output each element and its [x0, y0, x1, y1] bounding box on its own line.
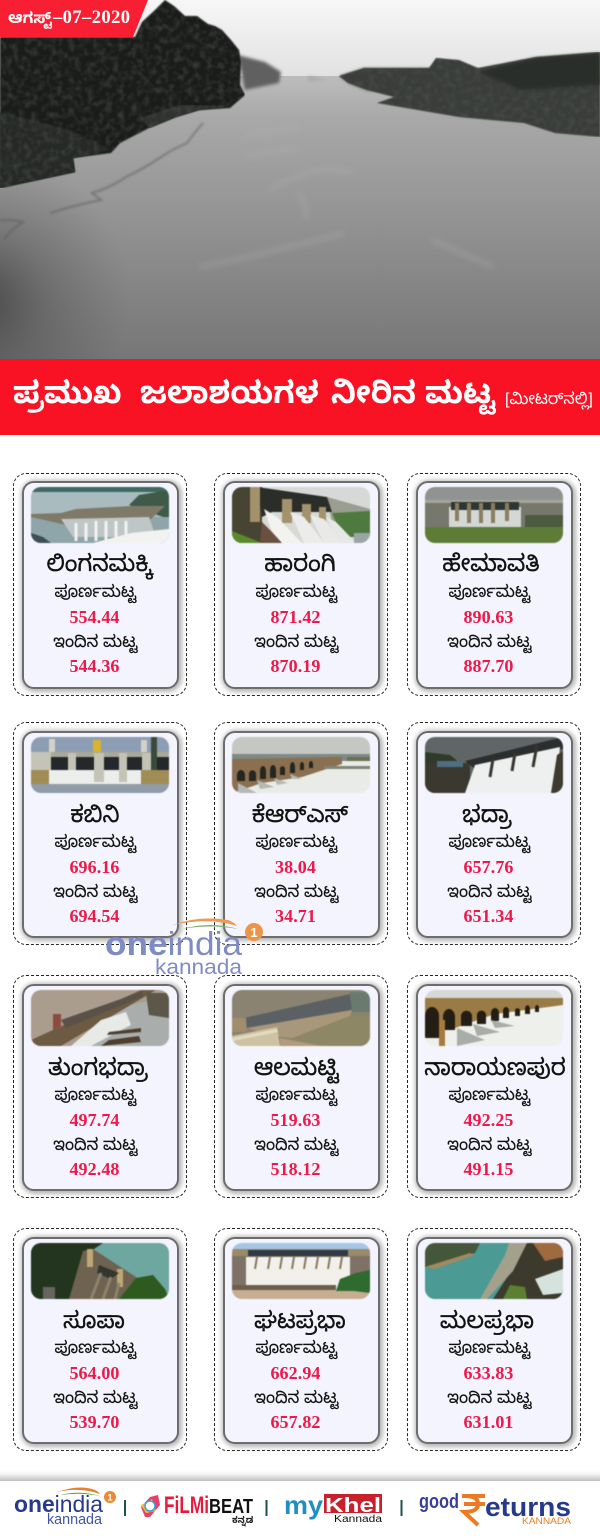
logo: goodreturns kannada: eturns [485, 1492, 571, 1522]
card: Kabini [13, 722, 187, 945]
hero photo: river in the rain [0, 0, 600, 359]
card: Tungabhadra [13, 975, 187, 1198]
logo: goodreturns kannada: KANNADA [522, 1516, 572, 1527]
card: Hemavathi [407, 473, 581, 696]
date flag: –07–2020 [52, 8, 130, 28]
photo: Bhadra dam [424, 736, 564, 794]
today level label: ಇಂದಿನ ಮಟ್ಟ [254, 1136, 339, 1154]
name: ಕಬಿನಿ [70, 801, 120, 827]
photo: Narayanapura dam [424, 990, 564, 1047]
watermark: oneindia kannada [105, 918, 263, 977]
logo: mykhel kannada: Khel [325, 1495, 381, 1517]
full level label: ಪೂರ್ಣಮಟ್ಟ [54, 1339, 137, 1357]
photo: Supa dam [30, 1242, 170, 1300]
photo: Malaprabha dam [424, 1242, 564, 1300]
card: Supa [13, 1228, 187, 1451]
footer logos [14, 1488, 572, 1528]
title heading: ನೀರಿನ [331, 375, 416, 410]
today level value: 631.01 [463, 1412, 514, 1432]
name: ಭದ್ರಾ [462, 801, 512, 827]
left bank and palms [0, 0, 245, 188]
separator [400, 1500, 402, 1516]
today level label: ಇಂದಿನ ಮಟ್ಟ [447, 883, 532, 901]
unit note: [ಮೀಟರ್‌ನಲ್ಲಿ] [505, 391, 593, 408]
card: Ghataprabha [214, 1228, 388, 1451]
today level value: 657.82 [270, 1412, 321, 1432]
separator [124, 1500, 126, 1516]
full level value: 696.16 [69, 857, 120, 877]
logo: mykhel kannada: my [284, 1490, 324, 1520]
logo: oneindia kannada: oneindia [14, 1491, 103, 1517]
full level value: 633.83 [463, 1363, 514, 1383]
title heading: ಪ್ರಮುಖ [13, 375, 122, 410]
today level label: ಇಂದಿನ ಮಟ್ಟ [254, 1389, 339, 1407]
logo: mykhel kannada: Kannada [334, 1514, 383, 1525]
name: ನಾರಾಯಣಪುರ [424, 1054, 566, 1080]
logo: oneindia kannada: kannada [47, 1511, 103, 1528]
photo: Almatti dam [231, 989, 371, 1047]
name: ಘಟಪ್ರಭಾ [254, 1307, 346, 1333]
today level value: 651.34 [463, 906, 514, 926]
name: ಮಲಪ್ರಭಾ [440, 1307, 534, 1333]
full level label: ಪೂರ್ಣಮಟ್ಟ [255, 833, 338, 851]
today level label: ಇಂದಿನ ಮಟ್ಟ [254, 633, 339, 651]
card: Narayanapura [407, 975, 581, 1198]
logo: filmibeat: ಕನ್ನಡ [232, 1515, 254, 1528]
card: Bhadra [407, 722, 581, 945]
full level value: 890.63 [463, 607, 514, 627]
separator [266, 1500, 268, 1516]
distant hazy tree lines [238, 55, 445, 92]
card: KRS [214, 722, 388, 945]
today level value: 870.19 [270, 656, 321, 676]
name: ಕೆಆರ್‌ಎಸ್ [252, 801, 348, 827]
today level label: ಇಂದಿನ ಮಟ್ಟ [53, 1389, 138, 1407]
full level value: 519.63 [270, 1110, 321, 1130]
full level value: 497.74 [69, 1110, 120, 1130]
date flag: ಆಗಸ್ಟ್ [8, 10, 53, 32]
logo: oneindia kannada [14, 1488, 116, 1528]
full level label: ಪೂರ್ಣಮಟ್ಟ [448, 833, 531, 851]
watermark: oneindia kannada: 1 [250, 925, 258, 940]
full level value: 657.76 [463, 857, 514, 877]
logo: goodreturns kannada [419, 1491, 572, 1527]
card: Harangi [214, 473, 388, 696]
photo: Hemavathi dam [424, 486, 564, 544]
full level value: 662.94 [270, 1363, 321, 1383]
name: ಹಾರಂಗಿ [264, 550, 336, 576]
full level value: 554.44 [69, 607, 120, 627]
photo: Linganamakki dam [30, 486, 170, 544]
full level label: ಪೂರ್ಣಮಟ್ಟ [448, 1339, 531, 1357]
title heading [13, 375, 496, 415]
today level label: ಇಂದಿನ ಮಟ್ಟ [447, 633, 532, 651]
logo: oneindia kannada: 1 [107, 1492, 113, 1502]
logo: filmibeat: FiLMi [164, 1492, 209, 1519]
photo: KRS dam [231, 736, 371, 794]
name: ಲಿಂಗನಮಕ್ಕಿ [46, 550, 152, 576]
today level label: ಇಂದಿನ ಮಟ್ಟ [447, 1136, 532, 1154]
today level label: ಇಂದಿನ ಮಟ್ಟ [53, 633, 138, 651]
logo: goodreturns kannada: good [419, 1491, 459, 1513]
logo: filmibeat: BEAT [209, 1496, 253, 1518]
today level value: 539.70 [69, 1412, 120, 1432]
photo: Ghataprabha dam [231, 1242, 371, 1300]
today level label: ಇಂದಿನ ಮಟ್ಟ [53, 1136, 138, 1154]
card: Linganamakki [13, 473, 187, 696]
card: Almatti [214, 975, 388, 1198]
name: ತುಂಗಭದ್ರಾ [48, 1054, 148, 1080]
today level value: 887.70 [463, 656, 514, 676]
full level label: ಪೂರ್ಣಮಟ್ಟ [448, 1086, 531, 1104]
full level label: ಪೂರ್ಣಮಟ್ಟ [54, 1086, 137, 1104]
photo: Kabini dam [30, 736, 170, 794]
today level label: ಇಂದಿನ ಮಟ್ಟ [53, 883, 138, 901]
today level value: 34.71 [275, 906, 316, 926]
watermark: oneindia kannada: oneindia [105, 925, 243, 962]
full level value: 492.25 [463, 1110, 514, 1130]
today level value: 492.48 [69, 1159, 120, 1179]
title heading: ಮಟ್ಟ [425, 375, 496, 410]
today level value: 491.15 [463, 1159, 514, 1179]
full level value: 564.00 [69, 1363, 120, 1383]
card: Malaprabha [407, 1228, 581, 1451]
today level value: 544.36 [69, 656, 120, 676]
right bank [339, 52, 600, 137]
full level label: ಪೂರ್ಣಮಟ್ಟ [54, 833, 137, 851]
today level label: ಇಂದಿನ ಮಟ್ಟ [447, 1389, 532, 1407]
title heading: ಜಲಾಶಯಗಳ [140, 375, 319, 410]
full level label: ಪೂರ್ಣಮಟ್ಟ [255, 1086, 338, 1104]
title banner [0, 359, 600, 435]
logo: mykhel kannada [284, 1490, 383, 1525]
full level label: ಪೂರ್ಣಮಟ್ಟ [54, 583, 137, 601]
full level label: ಪೂರ್ಣಮಟ್ಟ [255, 1339, 338, 1357]
name: ಆಲಮಟ್ಟಿ [254, 1054, 339, 1080]
full level label: ಪೂರ್ಣಮಟ್ಟ [448, 583, 531, 601]
photo: Tungabhadra dam [30, 989, 170, 1047]
name: ಹೇಮಾವತಿ [442, 550, 540, 576]
full level value: 38.04 [275, 857, 316, 877]
full level label: ಪೂರ್ಣಮಟ್ಟ [255, 583, 338, 601]
logo: filmibeat [141, 1492, 254, 1528]
today level value: 694.54 [69, 906, 120, 926]
today level label: ಇಂದಿನ ಮಟ್ಟ [254, 883, 339, 901]
photo: Harangi dam [231, 486, 371, 544]
full level value: 871.42 [270, 607, 321, 627]
name: ಸೂಪಾ [63, 1307, 125, 1333]
today level value: 518.12 [270, 1159, 321, 1179]
date flag [0, 0, 148, 37]
footer shadow band [0, 1470, 600, 1481]
